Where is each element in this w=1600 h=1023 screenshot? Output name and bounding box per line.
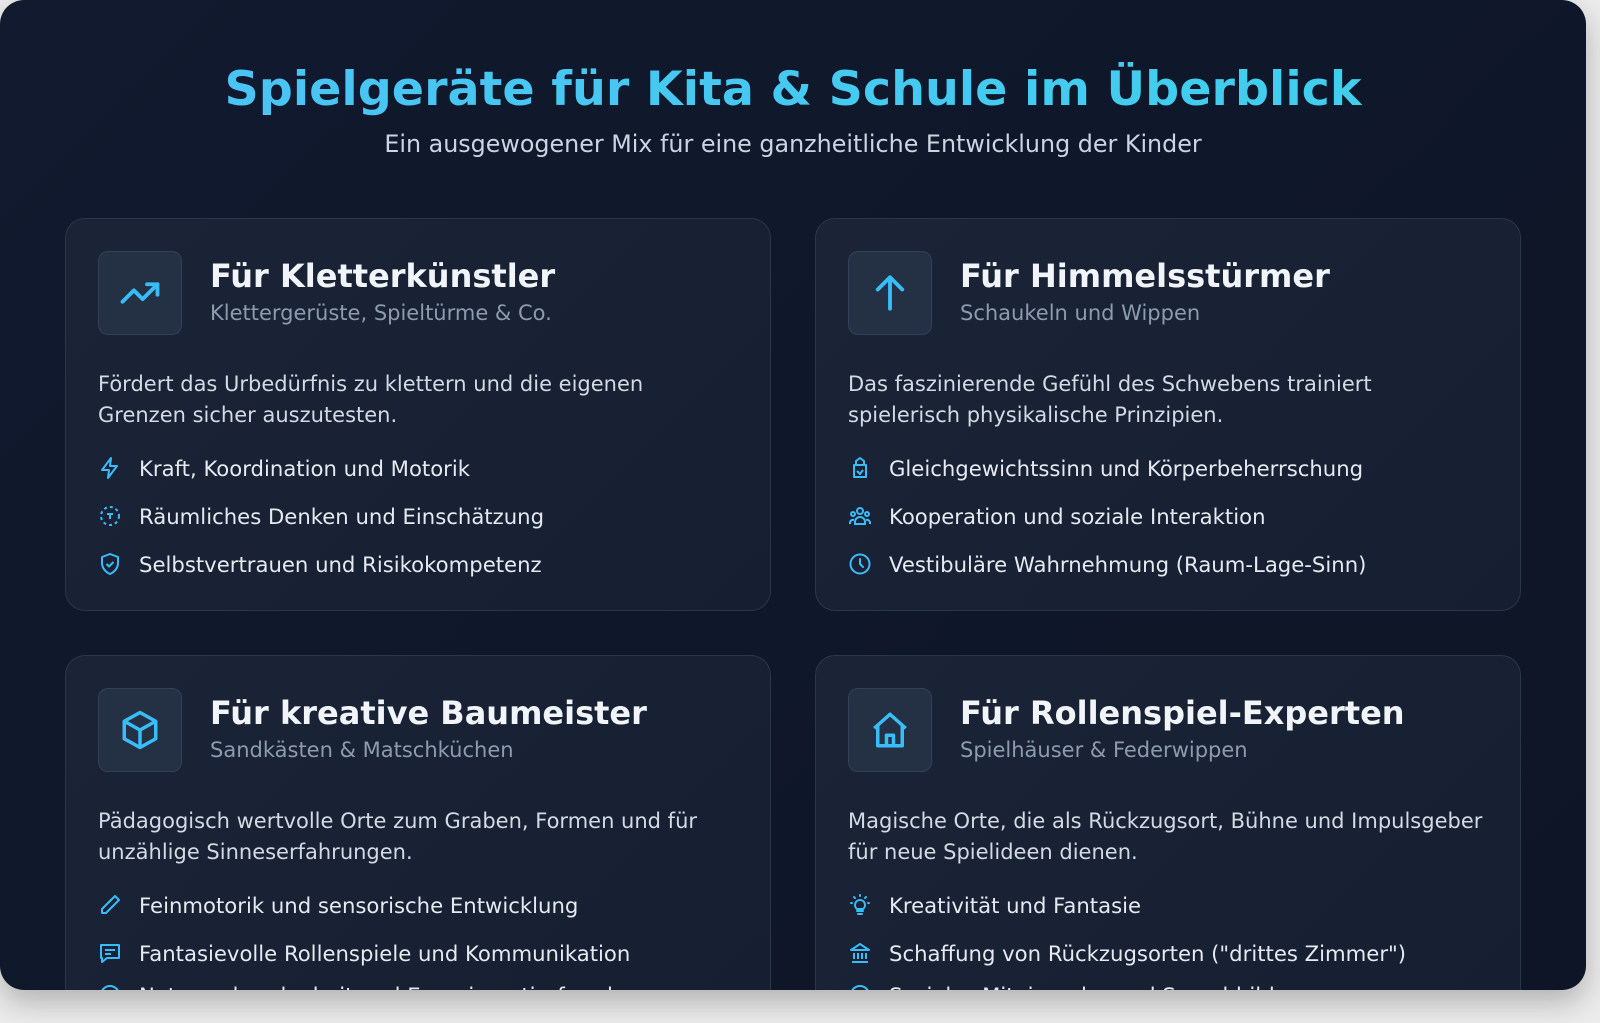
subheading: Spielhäuser & Federwippen bbox=[960, 738, 1248, 762]
bullet 3: Selbstvertrauen und Risikokompetenz bbox=[139, 552, 542, 576]
bullet 2: Fantasievolle Rollenspiele und Kommunikation bbox=[139, 940, 630, 966]
description: Das faszinierende Gefühl des Schwebens trainiert spielerisch physikalische Prinzipien. bbox=[848, 372, 1372, 427]
heading: Für kreative Baumeister bbox=[210, 694, 647, 732]
bullet 1: Kreativität und Fantasie bbox=[889, 892, 1141, 918]
panel: Rollenspiel-Experten bbox=[815, 655, 1521, 990]
bullet 1: Feinmotorik und sensorische Entwicklung bbox=[139, 892, 578, 918]
bullet 2: Räumliches Denken und Einschätzung bbox=[139, 504, 544, 528]
description: Magische Orte, die als Rückzugsort, Bühne und Impulsgeber für neue Spielideen dienen. bbox=[848, 809, 1482, 864]
panel: Kletterkünstler bbox=[65, 218, 771, 611]
bullet 2: Schaffung von Rückzugsorten ("drittes Zimmer") bbox=[889, 940, 1406, 966]
heading: Für Himmelsstürmer bbox=[960, 257, 1330, 295]
subheading: Klettergerüste, Spieltürme & Co. bbox=[210, 301, 552, 325]
icon: trending up bbox=[98, 251, 182, 335]
icon: cube bbox=[98, 688, 182, 772]
bullet 2: Kooperation und soziale Interaktion bbox=[889, 504, 1266, 528]
description: Fördert das Urbedürfnis zu klettern und die eigenen Grenzen sicher auszutesten. bbox=[98, 372, 643, 427]
panel: Himmelsstürmer bbox=[815, 218, 1521, 611]
subheading: Schaukeln und Wippen bbox=[960, 301, 1200, 325]
bullet 1: Kraft, Koordination und Motorik bbox=[139, 456, 470, 480]
title: Spielgeräte für Kita & Schule im Überblick bbox=[224, 62, 1362, 117]
heading: Für Kletterkünstler bbox=[210, 257, 555, 295]
icon: arrow up bbox=[848, 251, 932, 335]
bullet 3: Vestibuläre Wahrnehmung (Raum-Lage-Sinn) bbox=[889, 552, 1366, 576]
icon: house bbox=[848, 688, 932, 772]
bullet 1: Gleichgewichtssinn und Körperbeherrschung bbox=[889, 456, 1363, 480]
subtitle: Ein ausgewogener Mix für eine ganzheitliche Entwicklung der Kinder bbox=[384, 130, 1202, 158]
heading: Für Rollenspiel-Experten bbox=[960, 694, 1405, 732]
watermark: kigata.de bbox=[1050, 870, 1523, 965]
panel: Baumeister bbox=[65, 655, 771, 990]
subheading: Sandkästen & Matschküchen bbox=[210, 738, 514, 762]
description: Pädagogisch wertvolle Orte zum Graben, Formen und für unzählige Sinneserfahrungen. bbox=[98, 809, 697, 864]
